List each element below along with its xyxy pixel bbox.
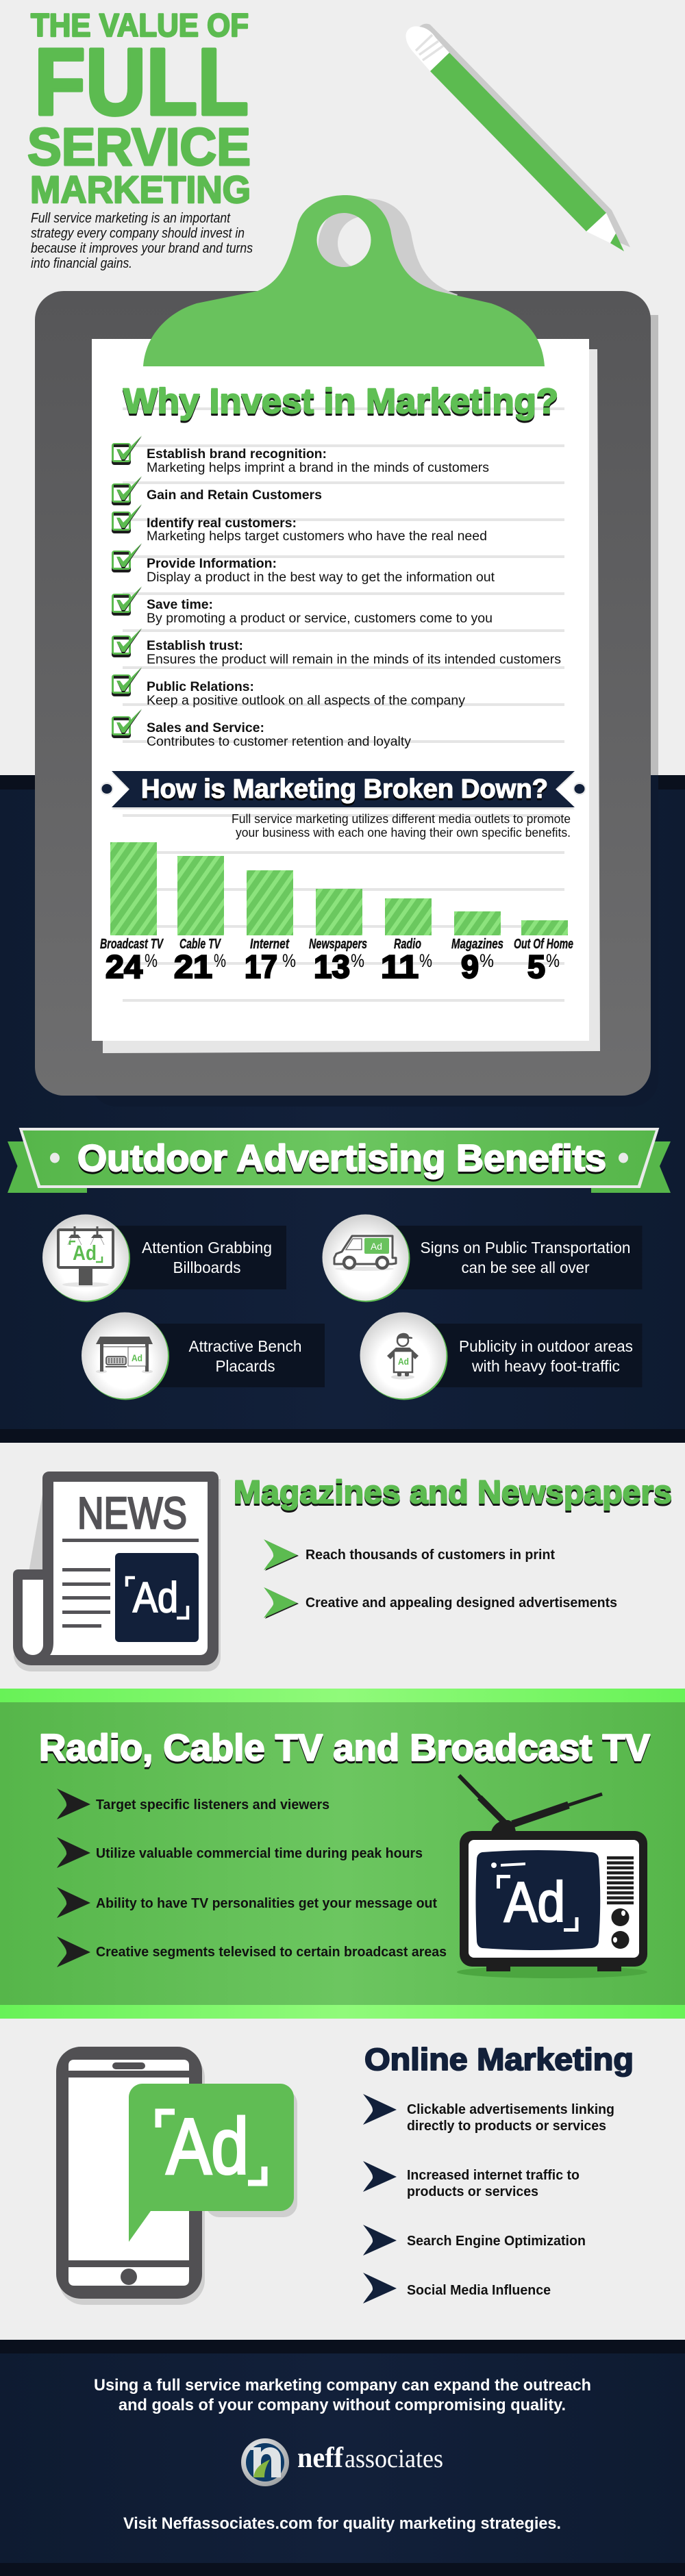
banner: how is marketing broken down: How is Marketing Broken Down?	[141, 774, 548, 804]
card text	[459, 1337, 633, 1375]
card text	[189, 1337, 301, 1375]
bar: radio: Radio	[394, 937, 421, 952]
icon: billboard	[58, 1226, 113, 1287]
bar: broadcast tv: %	[145, 950, 158, 971]
title: THE VALUE OF	[31, 7, 249, 43]
heading: magazines and newspapers: Magazines and Newspapers	[234, 1474, 672, 1510]
item: brand recognition: Marketing helps imprint a brand in the minds of customers	[147, 461, 489, 475]
bar: internet: 17	[245, 948, 277, 985]
bullet: internet traffic: Increased internet traffic to	[407, 2167, 580, 2183]
bar: magazines: 9	[461, 948, 479, 985]
heading: online marketing: Online Marketing	[364, 2042, 634, 2077]
logo: neff associates: associates	[345, 2445, 443, 2473]
bar: cable tv: 21	[174, 948, 212, 985]
checklist	[112, 435, 561, 749]
intro paragraph	[31, 211, 253, 271]
bullet: clickable ads	[363, 2094, 614, 2134]
card: public transportation	[322, 1215, 643, 1302]
icon: newspaper: Ad	[133, 1574, 178, 1621]
card text: Billboards	[173, 1259, 241, 1276]
clip shadow	[308, 199, 458, 308]
item: public relations	[112, 667, 466, 708]
intro paragraph: because it improves your brand and turns	[31, 241, 253, 256]
bullet: creative and appealing	[264, 1587, 617, 1619]
bullet: creative and appealing: Creative and appealing designed advertisements	[306, 1595, 617, 1611]
bar: magazines	[451, 911, 503, 985]
icon: bus shelter: Ad	[132, 1352, 142, 1363]
bar: newspapers	[309, 889, 367, 985]
item: save time: By promoting a product or service, customers come to you	[147, 611, 493, 626]
title	[27, 7, 251, 211]
bar: newspapers: Newspapers	[309, 937, 367, 952]
clipboard	[35, 195, 658, 1107]
footer call to action: Visit Neffassociates.com for quality marketing strategies.	[123, 2514, 561, 2533]
phone shadow	[59, 2053, 205, 2305]
title: FULL	[34, 29, 249, 135]
card: billboards	[42, 1215, 286, 1302]
card: foot traffic	[360, 1312, 643, 1400]
card text: Signs on Public Transportation	[421, 1239, 630, 1257]
bullet: social media	[363, 2273, 551, 2303]
card text: Attention Grabbing	[142, 1239, 272, 1257]
item: public relations: Public Relations:	[147, 679, 254, 694]
paper ruled lines	[123, 407, 564, 1002]
bullet: creative segments	[57, 1936, 447, 1967]
bar: radio: 11	[381, 948, 419, 985]
item: public relations: Keep a positive outlook on all aspects of the company	[147, 694, 466, 708]
bullet: target specific: Target specific listeners and viewers	[96, 1797, 329, 1813]
item: establish trust: Establish trust:	[147, 638, 243, 653]
text: media outlets intro: your business with each one having their own specific benefits.	[236, 826, 571, 839]
bullet: reach thousands	[264, 1539, 555, 1571]
intro paragraph: into financial gains.	[31, 256, 132, 271]
bar: out of home: 5	[527, 948, 545, 985]
icon: person with sign	[387, 1333, 419, 1379]
item: provide information	[112, 543, 495, 585]
intro paragraph: strategy every company should invest in	[31, 226, 245, 241]
card: bench placards	[82, 1312, 325, 1400]
icon: newspaper	[13, 1472, 221, 1671]
banner: outdoor advertising benefits	[8, 1128, 671, 1193]
bullet: social media: Social Media Influence	[407, 2282, 551, 2298]
item: real customers: Marketing helps target customers who have the real need	[147, 529, 487, 544]
item: save time: Save time:	[147, 597, 213, 612]
paper shadow	[103, 349, 600, 1053]
logo: neff associates: neff	[297, 2442, 344, 2474]
bullet: seo: Search Engine Optimization	[407, 2233, 586, 2249]
card text: Attractive Bench	[189, 1337, 301, 1355]
bar: newspapers: %	[351, 950, 364, 971]
heading: why invest: Why Invest in Marketing?	[123, 381, 558, 420]
bubble shadow	[206, 2090, 297, 2217]
icon: van: Ad	[371, 1241, 382, 1252]
bar: out of home	[514, 920, 573, 985]
title: SERVICE	[27, 118, 251, 177]
icon: newspaper: NEWS	[77, 1488, 187, 1538]
closing statement	[94, 2376, 591, 2414]
text: media outlets intro	[232, 812, 571, 839]
bullet: tv personalities	[57, 1887, 437, 1918]
bar: out of home: %	[546, 950, 560, 971]
card text	[421, 1239, 630, 1276]
item: real customers: Identify real customers:	[147, 516, 297, 531]
icon: smartphone with ad bubble: Ad	[166, 2103, 249, 2190]
closing statement: Using a full service marketing company can expand the outreach	[94, 2376, 591, 2395]
bar: radio: %	[419, 950, 432, 971]
clipboard shadow	[90, 315, 658, 1107]
bar: internet: %	[282, 950, 296, 971]
bullet: creative segments: Creative segments televised to certain broadcast areas	[96, 1944, 447, 1960]
icon: television	[457, 1776, 647, 1978]
bullet: clickable ads: Clickable advertisements linking	[407, 2101, 614, 2117]
bar: broadcast tv: 24	[105, 948, 142, 985]
newspaper shadow	[14, 1479, 221, 1671]
bar: magazines: Magazines	[451, 937, 503, 952]
heading: radio, cable tv and broadcast tv: Radio, Cable TV and Broadcast TV	[39, 1726, 650, 1769]
item: sales and service	[112, 709, 412, 749]
title: MARKETING	[30, 168, 251, 211]
icon: television: Ad	[504, 1870, 565, 1934]
item: brand recognition: Establish brand recognition:	[147, 446, 327, 462]
banner: how is marketing broken down	[100, 771, 586, 809]
icon: billboard: Ad	[73, 1241, 97, 1265]
bar: broadcast tv: Broadcast TV	[100, 937, 164, 952]
icon: bus shelter	[96, 1337, 153, 1374]
card text: with heavy foot-traffic	[471, 1357, 620, 1375]
bar: radio	[381, 898, 432, 985]
item: real customers	[112, 504, 487, 544]
bar chart	[100, 842, 573, 985]
item: sales and service: Contributes to customer retention and loyalty	[147, 735, 412, 749]
bullet: seo	[363, 2225, 586, 2256]
bar: cable tv: Cable TV	[179, 937, 221, 952]
item: provide information: Display a product in the best way to get the information out	[147, 570, 495, 585]
banner: outdoor advertising benefits: Outdoor Advertising Benefits	[77, 1137, 606, 1179]
card text: Publicity in outdoor areas	[459, 1337, 633, 1355]
bullet: target specific	[57, 1789, 329, 1819]
card text: can be see all over	[462, 1259, 590, 1276]
bullet: reach thousands: Reach thousands of customers in print	[306, 1547, 555, 1563]
bullet: internet traffic	[363, 2161, 580, 2199]
bullet: commercial time	[57, 1837, 423, 1868]
card text: Placards	[215, 1357, 275, 1375]
text: media outlets intro: Full service marketing utilizes different media outlets to promote	[232, 812, 571, 826]
bar: out of home: Out Of Home	[514, 937, 573, 952]
item: gain and retain: Gain and Retain Customers	[147, 488, 322, 503]
item: provide information: Provide Information:	[147, 556, 277, 571]
bar: cable tv	[174, 856, 226, 985]
bullet: clickable ads: directly to products or services	[407, 2118, 606, 2134]
icon: smartphone with ad bubble	[56, 2047, 297, 2305]
item: sales and service: Sales and Service:	[147, 720, 264, 735]
bullet: tv personalities: Ability to have TV personalities get your message out	[96, 1895, 437, 1911]
bullet: internet traffic: products or services	[407, 2184, 538, 2199]
card text	[142, 1239, 272, 1276]
bar: internet	[245, 870, 296, 985]
bar: magazines: %	[480, 950, 494, 971]
item: establish trust: Ensures the product will remain in the minds of its intended customers	[147, 653, 561, 667]
board	[35, 291, 651, 1096]
bar: broadcast tv	[100, 842, 164, 985]
bar: newspapers: 13	[314, 948, 350, 985]
item: brand recognition	[112, 435, 489, 475]
paper	[92, 339, 589, 1041]
item: gain and retain	[112, 476, 322, 505]
bullet: commercial time: Utilize valuable commercial time during peak hours	[96, 1845, 423, 1861]
clip	[143, 195, 545, 366]
closing statement: and goals of your company without compromising quality.	[119, 2396, 566, 2414]
icon: van	[334, 1236, 396, 1271]
bar: internet: Internet	[250, 937, 290, 952]
icon: person with sign: Ad	[398, 1356, 409, 1367]
logo: neff associates	[241, 2438, 443, 2486]
item: save time	[112, 586, 493, 626]
bar: cable tv: %	[214, 950, 226, 971]
intro paragraph: Full service marketing is an important	[31, 211, 231, 226]
item: establish trust	[112, 628, 561, 667]
icon: pencil	[406, 24, 630, 251]
